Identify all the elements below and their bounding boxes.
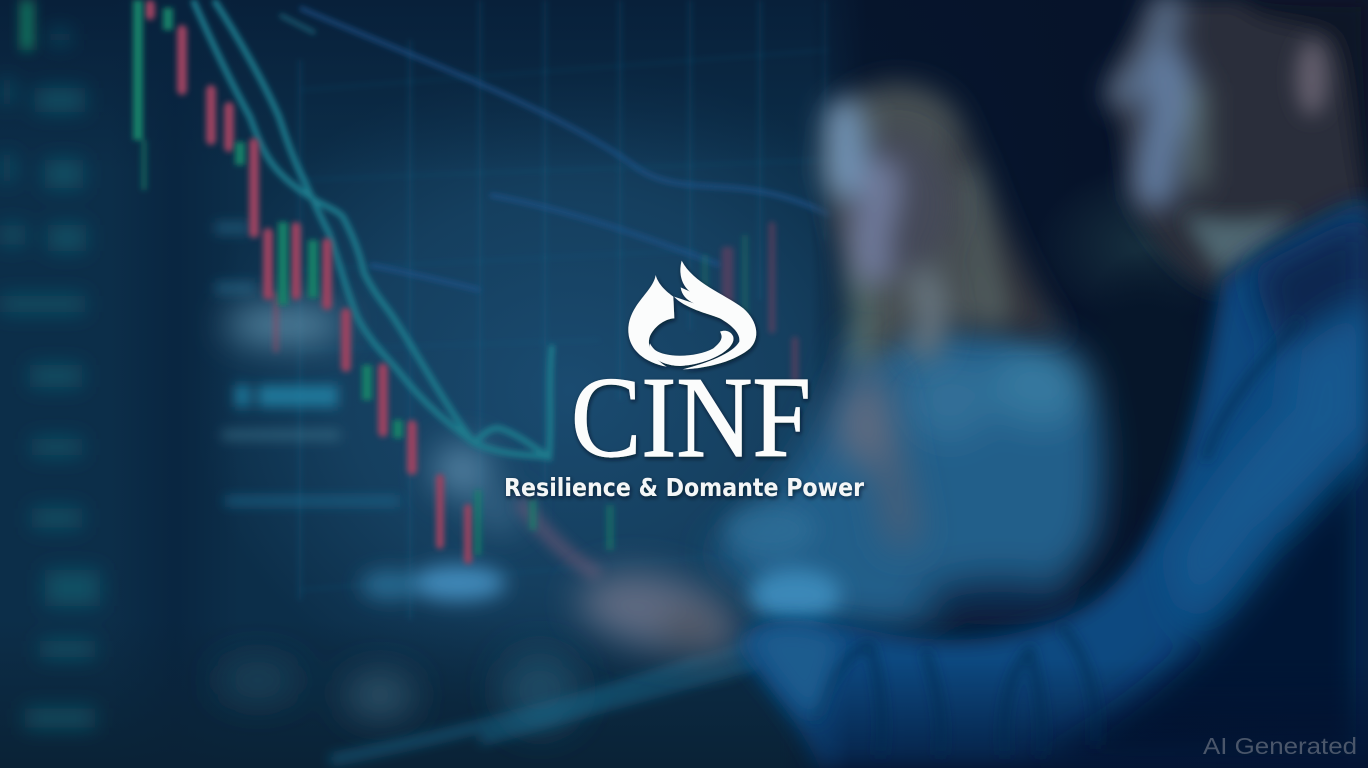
man ear (1296, 40, 1328, 116)
logo (504, 261, 865, 502)
grid lines on trading screen (300, 0, 830, 620)
wordmark: CINF (571, 354, 811, 482)
soft glowing blobs (218, 307, 580, 730)
sleeve floor shadow (802, 674, 1368, 768)
far-left green candle (21, 0, 33, 50)
tagline: Resilience & Domante Power (504, 473, 865, 502)
man hand (575, 572, 736, 654)
pale sleeve patch (725, 504, 841, 621)
man (575, 0, 1368, 768)
woman (710, 84, 1103, 628)
woman shirt (710, 324, 1103, 628)
woman face (837, 118, 953, 345)
left data table (0, 30, 100, 728)
woman arm and hand at chin (837, 370, 905, 545)
lower chart streaks (330, 625, 820, 760)
candlestick series: green (138, 0, 745, 555)
candlestick series: red (150, 5, 795, 560)
man shirt shading (1010, 210, 1368, 768)
teal trend lines (193, 0, 552, 457)
blue trend lines (280, 8, 830, 290)
dark backdrop behind people (810, 0, 1368, 768)
man head (1108, 0, 1368, 290)
man shirt (735, 200, 1368, 768)
faded candle trail near hand (520, 500, 600, 575)
man sleeve cuff folds (815, 320, 1300, 755)
people: blurred foreground (575, 0, 1368, 768)
blurred screen labels (215, 222, 400, 504)
icon: flame and droplet (628, 261, 756, 369)
man cuff highlight (750, 627, 840, 720)
watermark: AI Generated (1203, 733, 1357, 759)
man face highlights (1125, 10, 1197, 188)
woman hair (825, 84, 1065, 370)
